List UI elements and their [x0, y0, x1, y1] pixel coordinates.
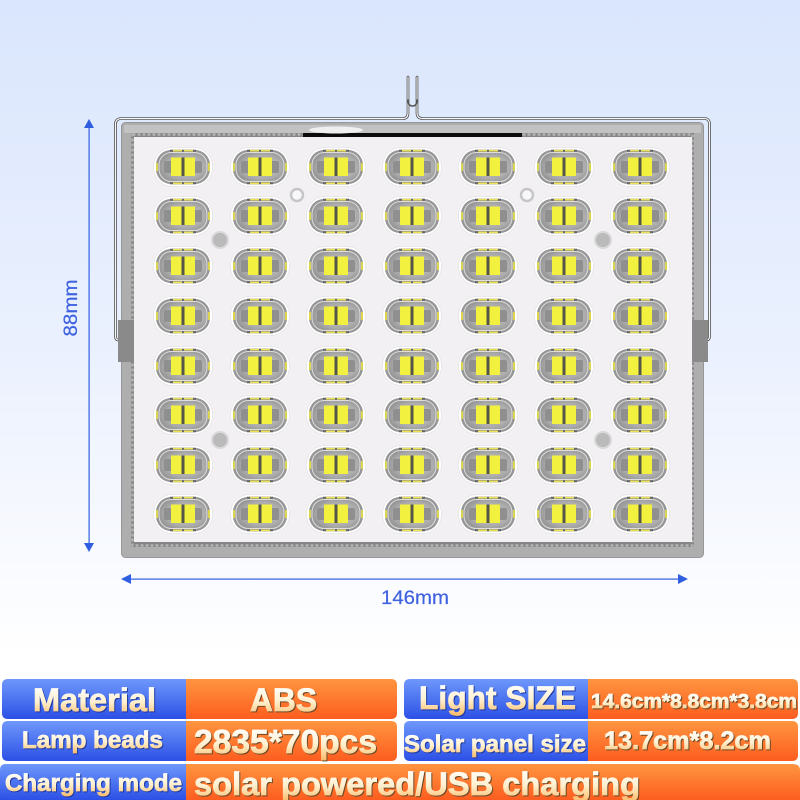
row: solar panel size	[404, 721, 798, 761]
housing bevel	[124, 125, 701, 133]
row: material	[2, 679, 397, 719]
mounting bracket wire	[116, 77, 710, 340]
arrow: width dimension	[121, 574, 688, 584]
width label: 146mm	[381, 588, 449, 609]
white LED board	[134, 137, 692, 542]
top black slot	[303, 133, 522, 137]
row: light size: 14.6cm*8.8cm*3.8cm	[591, 691, 797, 713]
row: lamp beads	[2, 721, 397, 761]
row: charging mode: Charging mode	[5, 770, 182, 797]
housing	[122, 122, 704, 558]
LED grid	[154, 148, 670, 534]
row: solar panel size: 13.7cm*8.2cm	[604, 727, 771, 755]
row: lamp beads: 2835*70pcs	[194, 724, 377, 761]
side clip right	[692, 320, 708, 362]
row: light size: Light SIZE	[419, 680, 576, 716]
arrow: height dimension	[84, 119, 94, 552]
row: lamp beads: Lamp beads	[22, 727, 163, 754]
dotted seal strip	[132, 134, 692, 546]
solar light product	[116, 77, 710, 558]
housing inner frame	[131, 133, 694, 547]
row: charging mode	[0, 764, 800, 800]
row: solar panel size: Solar panel size	[404, 731, 586, 758]
row: material: Material	[33, 682, 156, 718]
mounting screws	[212, 189, 611, 448]
spec table	[0, 679, 800, 800]
row: material: ABS	[250, 682, 317, 718]
top slot highlight	[309, 126, 363, 134]
height label: 88mm	[61, 279, 82, 337]
side clip left	[118, 320, 134, 362]
row: light size	[404, 679, 798, 719]
